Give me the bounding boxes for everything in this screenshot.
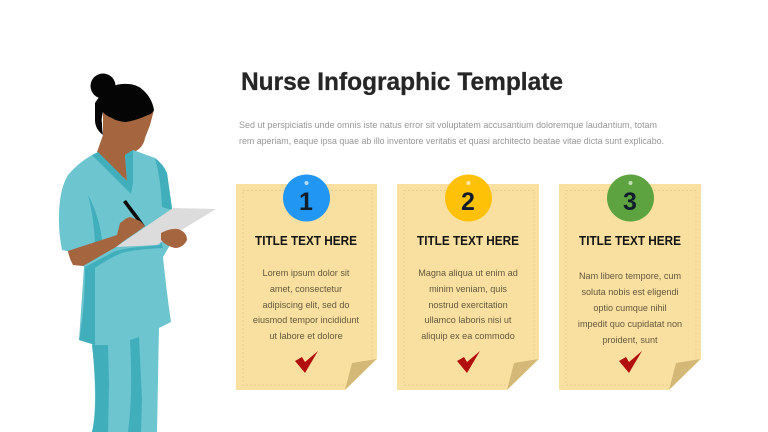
panel: card 3 xyxy=(559,174,701,390)
card 2 body: aliquip ex ea commodo xyxy=(421,331,515,341)
tunic collar xyxy=(92,150,133,194)
nurse arm xyxy=(68,217,145,266)
card 1 body: adipiscing elit, sed do xyxy=(263,300,349,310)
card 3 body: optio cumque nihil xyxy=(593,303,667,313)
number badge 2 xyxy=(445,174,492,222)
panel: card 1 xyxy=(236,174,377,390)
subtitle paragraph: rem aperiam, eaque ipsa quae ab illo inventore veritatis et quasi architecto beatae vitae dicta sunt explicabo. xyxy=(239,136,664,147)
panel: card 2 xyxy=(397,174,539,390)
card 2 heading: TITLE TEXT HERE xyxy=(417,234,519,248)
tunic right shade xyxy=(155,158,172,210)
card 3 heading: TITLE TEXT HERE xyxy=(579,234,681,248)
card 3 body: Nam libero tempore, cum xyxy=(579,271,681,281)
card 1 body: Lorem ipsum dolor sit xyxy=(263,268,350,278)
check mark 1 xyxy=(295,351,318,373)
card 2 body: minim veniam, quis xyxy=(429,284,507,294)
number badge 2: 2 xyxy=(461,188,475,216)
tunic left shade xyxy=(79,267,95,345)
clipboard xyxy=(116,208,216,247)
nurse trousers xyxy=(92,326,159,432)
card 1 heading: TITLE TEXT HERE xyxy=(255,234,357,248)
card 3 body xyxy=(578,271,682,345)
card 2 body: nostrud exercitation xyxy=(428,300,508,310)
illustration: nurse with clipboard xyxy=(59,74,216,432)
card 2 body xyxy=(418,268,518,341)
check mark 2 xyxy=(457,351,480,373)
number badge 1: 1 xyxy=(299,188,313,216)
sleeve fold xyxy=(88,195,102,243)
subtitle paragraph: Sed ut perspiciatis unde omnis iste natus error sit voluptatem accusantium doloremque laudantium, totam xyxy=(239,120,657,131)
nurse neck and face xyxy=(97,105,154,181)
card 1 body: eiusmod tempor incididunt xyxy=(253,315,360,325)
subtitle paragraph xyxy=(239,120,664,147)
nurse hair and bun xyxy=(90,74,154,135)
card 3 body: impedit quo cupidatat non xyxy=(578,319,682,329)
number badge 3: 3 xyxy=(623,188,637,216)
card 2 body: ullamco laboris nisi ut xyxy=(425,315,512,325)
hand and pen xyxy=(117,200,187,248)
nurse tunic xyxy=(59,150,173,345)
number badge 3 xyxy=(607,174,654,222)
number badge 1 xyxy=(283,174,330,222)
card 1 body xyxy=(253,268,360,341)
card 1 body: amet, consectetur xyxy=(270,284,342,294)
check mark 3 xyxy=(619,351,642,373)
title: Nurse Infographic Template xyxy=(241,68,563,96)
card 3 body: soluta nobis est eligendi xyxy=(581,287,679,297)
card 2 body: Magna aliqua ut enim ad xyxy=(418,268,518,278)
card 3 body: proident, sunt xyxy=(602,335,658,345)
card 1 body: ut labore et dolore xyxy=(269,331,343,341)
clipboard lower hem xyxy=(85,241,163,268)
